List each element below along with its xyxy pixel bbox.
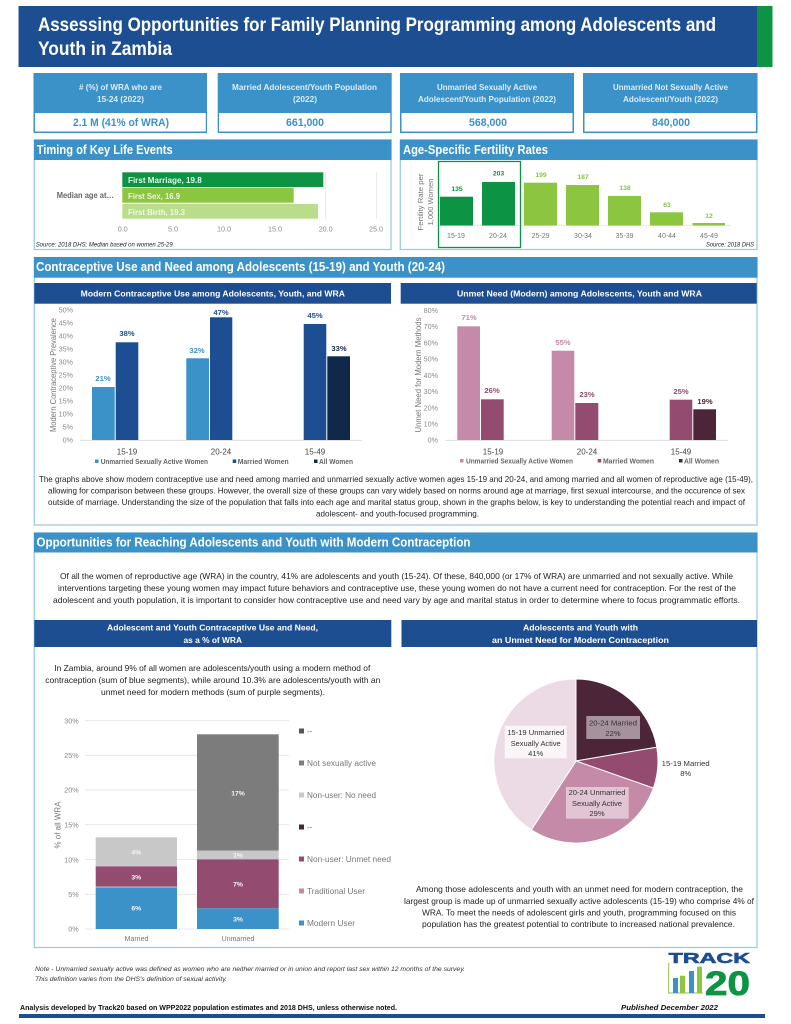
chart: modern contraceptive use: 50% [59, 306, 74, 314]
chart: unmet need: 10% [424, 420, 439, 429]
text block: pie explanation: largest group is made up of unmarried sexually active adolescents (15-19) who comprise 4% of [404, 897, 755, 906]
bar chart: fertility rates: 15-19 [447, 233, 465, 240]
stat card: unmarried sexually active: Adolescent/Youth Population (2022) [418, 95, 556, 104]
chart: modern contraceptive use: 15-19 [117, 448, 138, 456]
chart: unmet need: 30% [424, 387, 439, 396]
chart panel: contraceptive use and need as % of WRA [34, 620, 391, 943]
text block: pie explanation: Among those adolescents and youth with an unmet need for modern contraception, the [416, 885, 744, 894]
pie chart: Sexually Active [511, 739, 561, 748]
text block: opportunities intro: interventions targeting these young women may impact future behaviors and contraceptive use, these young women do not have a current need for contraception. For the rest of the [58, 584, 737, 593]
panel: timing of key life events [34, 140, 392, 250]
chart: unmet need: 26% [484, 386, 500, 395]
legend [299, 726, 391, 928]
chart: modern contraceptive use: 38% [119, 329, 135, 338]
stat card: unmarried sexually active [400, 73, 574, 133]
bar chart: median ages: First Sex, 16.9 [128, 192, 180, 201]
bar chart: fertility rates [416, 170, 731, 240]
stat card: married population: (2022) [293, 95, 317, 104]
legend: Unmarried Sexually Active Women [101, 457, 208, 466]
chart: modern contraceptive use: Modern Contraceptive Prevalence [49, 317, 58, 432]
panel: contraceptive use and need: Contraceptive Use and Need among Adolescents (15-19) and Youth (20-24) [36, 259, 445, 274]
panel: age-specific fertility rates: Age-Specific Fertility Rates [403, 142, 548, 157]
text block: graph explanation: allowing for comparison between these groups. However, the overall size of these groups can vary widely based on norms around age at marriage, first sexual intercourse, and the occurence of sex [48, 486, 745, 496]
stacked bar chart [54, 716, 391, 943]
bar chart: median ages: First Marriage, 19.8 [128, 176, 202, 185]
stat card: WRA 15-24: 15-24 (2022) [97, 95, 144, 104]
pie chart: 22% [605, 729, 621, 738]
stat card: WRA 15-24: # (%) of WRA who are [79, 83, 162, 92]
chart: unmet need: 23% [579, 390, 595, 399]
stacked bar chart: 6% [131, 906, 141, 912]
legend: Modern User [307, 919, 355, 928]
stat card: unmarried sexually active: Unmarried Sexually Active [437, 83, 537, 92]
text block: graph explanation [39, 475, 753, 518]
chart panel: contraceptive use and need as % of WRA: as a % of WRA [184, 635, 242, 645]
chart: modern contraceptive use: 30% [59, 358, 74, 366]
logo: Track20: 20 [705, 965, 750, 1003]
stacked bar chart: % of all WRA [54, 801, 62, 848]
panel: age-specific fertility rates [400, 140, 758, 250]
chart: unmet need: Unmet Need (Modern) among Adolescents, Youth and WRA [457, 288, 702, 298]
bar chart: median ages: 10.0 [217, 224, 231, 234]
footer credit: Analysis developed by Track20 based on WPP2022 population estimates and 2018 DHS, unless otherwise noted. [20, 1005, 397, 1012]
chart panel: unmet need pie: Adolescents and Youth with [523, 622, 638, 632]
chart: modern contraceptive use: Modern Contraceptive Use among Adolescents, Youth, and WRA [81, 288, 345, 298]
chart: modern contraceptive use: 33% [331, 344, 347, 353]
chart: unmet need: 55% [555, 338, 571, 347]
stacked bar chart: Married [125, 936, 148, 943]
chart: modern contraceptive use: 21% [95, 374, 111, 383]
bar chart: fertility rates: 30-34 [574, 233, 592, 240]
pie chart: 29% [589, 809, 605, 818]
chart: unmet need: 60% [424, 338, 439, 348]
title banner [18, 6, 772, 67]
chart: modern contraceptive use: 45% [59, 318, 74, 328]
bar chart: fertility rates: 138 [619, 185, 631, 192]
footnote [35, 966, 465, 983]
chart: unmet need: 20-24 [577, 448, 598, 456]
bar chart: median ages: First Birth, 19.3 [128, 208, 185, 217]
chart: modern contraceptive use: 32% [189, 346, 205, 355]
chart: modern contraceptive use: 40% [59, 332, 74, 340]
publication date: Published December 2022 [621, 1005, 718, 1012]
bar chart: fertility rates: 203 [493, 170, 504, 178]
pie chart: 15-19 Unmarried [507, 728, 564, 737]
panel: timing of key life events: Timing of Key Life Events [37, 142, 173, 157]
chart: modern contraceptive use [34, 283, 391, 466]
legend: Traditional User [307, 887, 365, 896]
legend: Married Women [603, 456, 654, 466]
bar chart: fertility rates: 63 [663, 202, 671, 209]
pie chart: 20-24 Unmarried [568, 788, 626, 797]
stacked bar chart: 25% [64, 751, 79, 760]
text block: pie explanation: population has the greatest potential to contribute to increased national prevalence. [422, 920, 735, 929]
stacked bar chart: 17% [231, 790, 245, 798]
chart panel: contraceptive use and need as % of WRA: contraception (sum of blue segments), while around 10.3% are adolescents/youth with an [45, 676, 380, 685]
stat card: WRA 15-24 [34, 73, 207, 133]
chart panel: unmet need pie: an Unmet Need for Modern Contraception [492, 635, 669, 645]
stat card: unmarried not sexually active: 840,000 [652, 117, 690, 129]
bar chart: fertility rates: 199 [535, 172, 547, 179]
pie chart: Sexually Active [572, 799, 622, 808]
chart: modern contraceptive use: 47% [213, 308, 229, 317]
chart panel: contraceptive use and need as % of WRA: Adolescent and Youth Contraceptive Use and Need, [107, 622, 318, 632]
chart: unmet need: 71% [461, 313, 477, 322]
stacked bar chart: 15% [64, 820, 79, 830]
text block: pie explanation: WRA. To meet the needs of adolescent girls and youth, programming focused on this [422, 908, 736, 918]
text block: graph explanation: outside of marriage. Understanding the size of the population that falls into each age and marital status group, shown in the graphs below, is key to understanding the potential reach and impact of [48, 498, 746, 507]
text block: graph explanation: The graphs above show modern contraceptive use and need among married and unmarried sexually active women ages 15-19 and 20-24, and among married and all women of reproductive age (15-49), [39, 475, 753, 484]
chart: unmet need: 70% [424, 322, 439, 331]
text block: pie explanation [404, 885, 755, 929]
bar chart: median ages: 25.0 [369, 224, 383, 234]
bar chart: fertility rates: Fertility Rate per [416, 173, 425, 230]
chart: modern contraceptive use: 10% [59, 410, 74, 418]
bar chart: fertility rates: 1,000 Women [426, 178, 435, 226]
chart: unmet need: 15-19 [483, 448, 504, 456]
chart: modern contraceptive use: 25% [59, 370, 74, 380]
footer bar [19, 1014, 765, 1018]
pie chart: 8% [680, 769, 691, 778]
stat card: unmarried not sexually active: Adolescent/Youth (2022) [623, 95, 718, 104]
bar chart: fertility rates: 40-44 [658, 233, 676, 240]
pie chart: 41% [528, 749, 544, 758]
panel: opportunities for reaching adolescents and youth [34, 532, 758, 948]
legend: -- [307, 822, 313, 832]
stacked bar chart: 20% [64, 786, 79, 795]
stacked bar chart: 1% [233, 852, 243, 860]
pie chart: 15-19 Married [662, 759, 710, 768]
chart: modern contraceptive use: 5% [63, 422, 74, 432]
legend: Not sexually active [307, 759, 377, 768]
bar chart: median ages: 15.0 [268, 224, 282, 234]
chart panel: contraceptive use and need as % of WRA: unmet need for modern methods (sum of purple segments). [101, 688, 325, 697]
bar chart: fertility rates: 35-39 [616, 233, 634, 240]
title banner: Youth in Zambia [38, 38, 172, 60]
chart: unmet need: 40% [424, 371, 439, 380]
stat card: married population [218, 73, 392, 133]
text block: graph explanation: adolescent- and youth-focused programming. [316, 510, 479, 518]
chart: modern contraceptive use: 0% [63, 436, 74, 444]
chart: unmet need: 19% [697, 397, 713, 406]
chart: modern contraceptive use: 45% [307, 311, 323, 320]
bar chart: fertility rates: 20-24 [489, 233, 507, 240]
chart: modern contraceptive use: 20-24 [211, 448, 232, 456]
stat card: WRA 15-24: 2.1 M (41% of WRA) [73, 117, 169, 129]
legend: Non-user: No need [307, 791, 376, 800]
stat card: unmarried sexually active: 568,000 [469, 117, 507, 129]
stacked bar chart: 10% [64, 856, 79, 864]
stacked bar chart: Unmarried [222, 936, 254, 943]
chart: modern contraceptive use: 15-49 [305, 448, 326, 456]
bar chart: fertility rates: 12 [705, 213, 713, 220]
bar chart: median ages [57, 172, 383, 234]
bar chart: fertility rates: 135 [451, 186, 463, 193]
stacked bar chart: 7% [233, 882, 243, 888]
text block: opportunities intro: adolescent and youth population, it is important to consider how contraceptive use and need vary by age and marital status in order to determine where to focus programmatic efforts. [53, 596, 740, 605]
stacked bar chart: 3% [233, 916, 243, 924]
chart: unmet need: 25% [673, 387, 689, 396]
legend: All Women [684, 456, 719, 466]
chart: unmet need: 0% [428, 436, 439, 444]
legend [95, 457, 353, 466]
bar chart: median ages: Median age at… [57, 191, 114, 200]
bar chart: fertility rates: 45-49 [700, 233, 718, 240]
bar chart: median ages: 0.0 [118, 224, 128, 234]
stat card: unmarried not sexually active: Unmarried Not Sexually Active [613, 83, 728, 92]
stacked bar chart: 3% [131, 874, 141, 882]
bar chart: fertility rates: 25-29 [532, 233, 550, 240]
legend: Non-user: Unmet need [307, 855, 391, 864]
pie chart: 20-24 Married [589, 718, 637, 728]
logo: Track20: TRACK [669, 950, 750, 967]
chart: unmet need [401, 283, 757, 466]
stat card: married population: Married Adolescent/Youth Population [232, 83, 377, 92]
legend: All Women [319, 457, 353, 466]
chart panel: contraceptive use and need as % of WRA: In Zambia, around 9% of all women are adolescents/youth using a modern method of [54, 664, 371, 673]
legend [460, 456, 719, 466]
legend: Married Women [238, 457, 289, 466]
chart: unmet need: 15-49 [671, 448, 692, 456]
text block: opportunities intro [53, 572, 740, 605]
stacked bar chart: 30% [64, 716, 79, 726]
stat card: unmarried not sexually active [583, 73, 758, 133]
chart panel: unmet need pie [402, 620, 757, 929]
bar chart: median ages: 20.0 [319, 224, 333, 234]
legend: Unmarried Sexually Active Women [466, 456, 573, 466]
stacked bar chart: 0% [68, 925, 79, 934]
pie chart [494, 679, 710, 843]
footnote: This definition varies from the DHS's definition of sexual activity. [35, 976, 227, 983]
chart: unmet need: 50% [424, 355, 439, 364]
bar chart: median ages: 5.0 [168, 224, 178, 234]
stacked bar chart: 5% [68, 890, 79, 899]
chart: unmet need: 80% [424, 306, 439, 315]
source note: Source: 2018 DHS; Median based on women 25-29 [36, 242, 173, 248]
logo: Track20 [669, 950, 750, 1003]
chart: unmet need: Unmet Need for Modern Methods [414, 318, 423, 432]
source note: Source: 2018 DHS [706, 242, 754, 248]
chart: modern contraceptive use: 15% [59, 396, 74, 406]
chart: unmet need: 20% [424, 404, 439, 412]
bar chart: fertility rates: 187 [577, 174, 589, 181]
panel: opportunities for reaching adolescents and youth: Opportunities for Reaching Adolescents and Youth with Modern Contraception [36, 534, 471, 550]
footnote: Note - Unmarried sexually active was defined as women who are neither married or in union and report last sex within 12 months of the survey. [35, 966, 465, 973]
highlight box: 15-24 age groups [438, 162, 520, 248]
stacked bar chart: 4% [131, 850, 141, 856]
text block: opportunities intro: Of all the women of reproductive age (WRA) in the country, 41% are adolescents and youth (15-24). Of these, 840,000 (or 17% of WRA) are unmarried and not sexually active. While [60, 572, 734, 581]
chart: modern contraceptive use: 35% [59, 344, 74, 354]
panel: contraceptive use and need [34, 257, 758, 525]
stat card: married population: 661,000 [286, 117, 324, 129]
legend: -- [307, 726, 313, 736]
chart: modern contraceptive use: 20% [59, 384, 74, 392]
